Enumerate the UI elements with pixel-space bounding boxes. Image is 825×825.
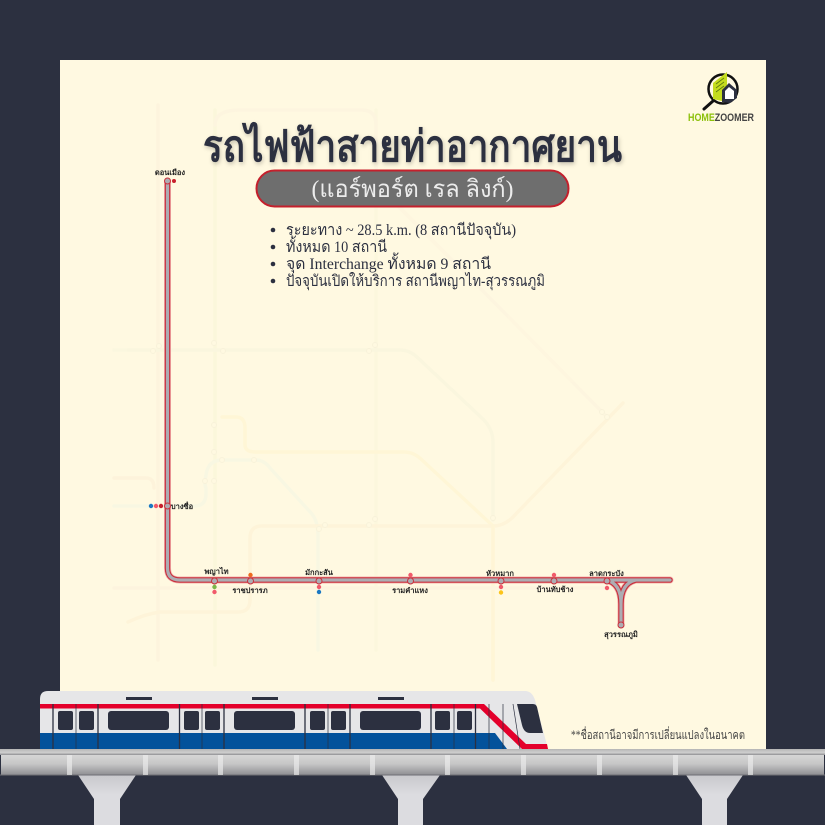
bullet list [271, 222, 545, 291]
Airport Rail Link route line [168, 181, 670, 625]
icon: magnifier with building and house [704, 72, 738, 109]
station: Hua Mak [486, 569, 514, 595]
station: Ramkhamhaeng: รามคำแหง [392, 586, 428, 595]
station: Suvarnabhumi: สุวรรณภูมิ [604, 630, 638, 640]
illustration: viaduct beam [0, 749, 825, 776]
bullet list: ทั้งหมด 10 สถานี [286, 235, 387, 256]
station: Ratchaprarop [232, 573, 268, 595]
station: Ban Thap Chang: บ้านทับช้าง [537, 585, 574, 594]
bullet list: ระยะทาง ~ 28.5 k.m. (8 สถานีปัจจุบัน) [286, 222, 516, 240]
station: Lat Krabang: ลาดกระบัง [589, 569, 624, 578]
station: Ban Thap Chang [537, 573, 574, 594]
red upper stripe [40, 704, 548, 749]
stations and interchange dots [149, 168, 638, 640]
station: Makkasan [305, 568, 334, 594]
station: Bang Sue: บางซื่อ [171, 500, 193, 511]
faint background network map [114, 105, 670, 680]
small door windows [58, 711, 472, 730]
station: Don Mueang: ดอนเมือง [155, 168, 185, 177]
subtitle pill: (แอร์พอร์ต เรล ลิงก์) [312, 175, 514, 203]
subtitle pill [256, 170, 568, 206]
station: Phaya Thai: พญาไท [204, 566, 229, 576]
wide windows [108, 711, 421, 730]
footnote: **ชื่อสถานีอาจมีการเปลี่ยนแปลงในอนาคต [571, 726, 745, 742]
panel: cream background [60, 60, 766, 760]
station: Phaya Thai [204, 566, 229, 594]
station: Hua Mak: หัวหมาก [486, 569, 514, 578]
bullet list: ปัจจุบันเปิดให้บริการ สถานีพญาไท-สุวรรณภูมิ [286, 272, 545, 291]
illustration: Skytrain [40, 691, 548, 749]
station: Lat Krabang [589, 569, 624, 590]
title: รถไฟฟ้าสายท่าอากาศยาน [203, 121, 623, 171]
station: Makkasan: มักกะสัน [305, 568, 334, 577]
cab windscreen [517, 704, 543, 733]
roof vents [126, 697, 404, 700]
bullet list: จุด Interchange ทั้งหมด 9 สถานี [286, 252, 491, 274]
door seams [53, 704, 520, 749]
station: Suvarnabhumi [604, 622, 638, 640]
station: Ratchaprarop: ราชปรารภ [232, 586, 268, 595]
illustration: elevated viaduct pillars [78, 775, 743, 825]
station: Don Mueang [155, 168, 185, 184]
train body [40, 691, 548, 749]
logo: Home Zoomer [688, 72, 754, 124]
blue lower band [40, 733, 507, 749]
station: Ramkhamhaeng [392, 573, 428, 595]
station: Bang Sue [149, 500, 193, 511]
logo wordmark: HOMEZOOMER [688, 112, 754, 124]
